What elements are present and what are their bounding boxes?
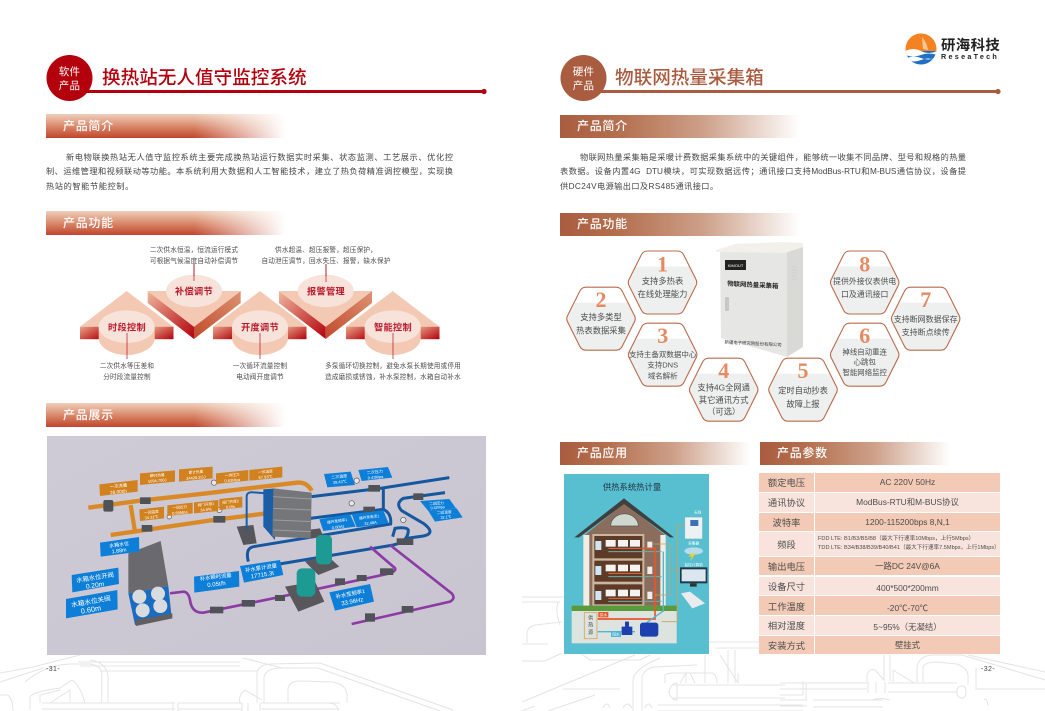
section heading: display xyxy=(46,403,285,427)
section heading: intro: 产品简介 xyxy=(577,119,628,133)
image: heat exchange station 3D scene: 17715.3t xyxy=(251,571,275,580)
heading rule xyxy=(560,55,1001,101)
hexagon text: 支持断点续传 xyxy=(902,327,950,337)
down arrow: alarm xyxy=(279,275,372,339)
section heading: display: 产品展示 xyxy=(63,408,114,422)
section heading: application: 产品应用 xyxy=(577,446,628,460)
image: heat exchange station 3D scene: 补水瞬时流量 xyxy=(199,571,233,583)
row: baud xyxy=(759,513,1000,531)
hexagon text xyxy=(576,276,958,416)
row: working temp: 工作温度 xyxy=(768,602,805,612)
row: protocol xyxy=(759,493,1000,512)
valves xyxy=(103,485,423,622)
row: output voltage xyxy=(759,557,1000,575)
caption: compensation: 二次供水恒温，恒流运行模式 xyxy=(150,247,238,254)
ellipse labels: 报警管理 xyxy=(307,286,345,296)
row: baud: 1200-115200bps 8,N,1 xyxy=(865,517,950,527)
image: heating system house diagram xyxy=(564,474,709,654)
hexagon text: 提供外接仪表供电 xyxy=(833,276,896,286)
text block: intro xyxy=(46,153,453,191)
water tank xyxy=(128,541,172,626)
caption: compensation: 可根据气候温度自动补偿调节 xyxy=(150,258,238,265)
image: collector cabinet: KIMOUT xyxy=(728,263,744,268)
row: humidity: 5~95%（无凝结） xyxy=(873,622,942,632)
chart: function triangles xyxy=(80,275,440,359)
hexagon text: 故障上报 xyxy=(786,399,820,409)
row: bands: FDD LTE: B1/B3/B5/B8（最大下行速率10Mbps，上行5Mbps） xyxy=(818,536,974,542)
row: mounting: 壁挂式 xyxy=(895,640,920,650)
row: size: 400*500*200mm xyxy=(876,583,939,593)
section heading: intro xyxy=(560,115,800,138)
hexagon numbers: 2 xyxy=(596,287,606,312)
feature hexagons xyxy=(566,250,960,422)
image: heat exchange station 3D scene: 补水泵频率1 xyxy=(335,587,366,600)
row: working temp: -20℃-70℃ xyxy=(887,603,928,613)
image: heat exchange station 3D scene xyxy=(47,436,486,655)
row: mounting: 安装方式 xyxy=(768,641,805,651)
image: heat exchange station 3D scene: 阀门开度2 xyxy=(222,498,239,505)
image: heating system house diagram: 供 xyxy=(588,614,593,621)
image: heat exchange station 3D scene: 34.8% xyxy=(200,506,212,513)
caption: alarm: 供水超温、超压报警，超压保护， xyxy=(275,247,377,254)
image: heat exchange station 3D scene: 0.60m xyxy=(80,603,102,616)
heading rule xyxy=(46,55,487,101)
row: rated voltage: AC 220V 50Hz xyxy=(880,477,935,487)
down arrow: compensation xyxy=(148,275,241,339)
hexagon text: 支持多类型 xyxy=(580,312,622,322)
hexagon text: 在线处理能力 xyxy=(638,289,687,299)
image: heat exchange station 3D scene: 阀门开度1 xyxy=(197,501,214,508)
blue data labels xyxy=(66,467,463,618)
badge: hardware product xyxy=(573,66,594,92)
hexagon numbers: 8 xyxy=(859,252,870,277)
row: bands: 频段 xyxy=(777,540,796,550)
gauges xyxy=(167,478,406,523)
image: heat exchange station 3D scene: 32.1℃ xyxy=(440,515,452,520)
row: output voltage: 输出电压 xyxy=(768,562,805,572)
hexagon text: 支持主备双数据中心 xyxy=(629,349,697,359)
hexagon text: （可选） xyxy=(707,406,740,416)
image: heating system house diagram: 天线 xyxy=(694,509,702,514)
hexagon numbers: 4 xyxy=(718,358,729,383)
section heading: functions: 产品功能 xyxy=(63,216,114,230)
caption: time control: 二次供水等压差和 xyxy=(100,363,154,370)
image: heat exchange station 3D scene: 0.32Mpa xyxy=(430,505,446,510)
section heading: functions: 产品功能 xyxy=(577,217,628,231)
image: heat exchange station 3D scene: 二回压力 xyxy=(429,500,444,506)
row: mounting xyxy=(759,636,1000,654)
hexagon text: 域名解析 xyxy=(648,370,678,380)
purple pipes xyxy=(170,545,453,624)
ellipse labels: 智能控制 xyxy=(374,322,412,332)
logo: ReseaTech xyxy=(906,34,1000,64)
image: heat exchange station 3D scene: 一次流量 xyxy=(110,481,128,490)
image: heat exchange station 3D scene: 0.69Mpa xyxy=(172,509,189,516)
logo Chinese name: 研海科技 xyxy=(941,38,1000,54)
hexagon text: 心跳包 xyxy=(854,358,876,366)
section heading: functions xyxy=(560,213,800,236)
image: heat exchange station 3D scene: 0.63Mpa xyxy=(224,477,241,483)
hexagon text: 口及通讯接口 xyxy=(841,289,888,299)
image: heat exchange station 3D scene: 33.96Hz xyxy=(341,597,364,607)
image: heat exchange station 3D scene: 二次温度 xyxy=(331,472,347,480)
hexagon text: 支持断网数据保存 xyxy=(894,314,958,324)
image: heat exchange station 3D scene: 0.00Hz xyxy=(331,523,345,530)
ellipse labels: 补偿调节 xyxy=(175,286,213,296)
image: heat exchange station 3D scene: 循环泵频率1 xyxy=(327,517,348,525)
caption: smart control xyxy=(325,362,461,381)
hexagon text: 定时自动抄表 xyxy=(778,386,829,396)
image: heat exchange station 3D scene: 0.0% xyxy=(226,504,236,510)
logo icon xyxy=(906,34,936,64)
heat exchanger xyxy=(237,488,323,545)
section heading: application xyxy=(560,442,750,465)
page number: 31: -31- xyxy=(46,666,60,673)
row: working temp xyxy=(759,596,1000,615)
text block: intro: 供DC24V电源输出口及RS485通讯接口。 xyxy=(560,182,718,191)
caption: valve control xyxy=(233,362,287,381)
image: collector cabinet xyxy=(716,242,803,357)
image: heat exchange station 3D scene: 0.43Mpa xyxy=(368,474,384,480)
ellipse labels: 开度调节 xyxy=(241,322,279,332)
image: heat exchange station 3D scene: 0.20m xyxy=(85,581,105,591)
pumps xyxy=(285,535,339,612)
badge: hardware product: 产品 xyxy=(573,80,594,92)
section heading: intro: 产品简介 xyxy=(63,119,114,133)
badge: software product: 软件 xyxy=(59,66,80,78)
row: protocol: 通讯协议 xyxy=(768,498,805,508)
up arrow: smart control xyxy=(346,291,440,355)
row: rated voltage: 额定电压 xyxy=(768,478,805,488)
hexagon numbers: 3 xyxy=(657,323,668,348)
hexagon text: 掉线自动重连 xyxy=(843,348,887,356)
image: heat exchange station 3D scene: 瞬时热量 xyxy=(150,472,165,478)
hexagon numbers: 7 xyxy=(920,287,931,312)
hexagon text: 支持多热表 xyxy=(642,276,684,286)
hexagon text: 智能网络监控 xyxy=(843,368,887,377)
image: heating system house diagram: 供水 xyxy=(600,612,607,617)
badge: software product: 产品 xyxy=(59,80,80,92)
image: heat exchange station 3D scene: 水箱水位开阀 xyxy=(75,570,114,585)
image: heat exchange station 3D scene: 24428.2GJ xyxy=(186,474,206,481)
text block: intro: 制、运维管理和视频联动等功能。本系统利用大数据和人工智能技术，建立了热负荷精准调控模型，实现换 xyxy=(46,167,453,176)
image: heat exchange station 3D scene: 一供温度 xyxy=(258,468,273,475)
hexagon numbers: 6 xyxy=(859,323,870,348)
title: 换热站无人值守监控系统 xyxy=(102,67,307,88)
image: heat exchange station 3D scene: 水箱水位关阀 xyxy=(70,593,112,609)
section heading: parameters: 产品参数 xyxy=(777,446,828,460)
image: heat exchange station 3D scene: 28.00t/h xyxy=(110,488,128,495)
image: heat exchange station 3D scene: 1094.700J xyxy=(148,477,167,484)
row: baud: 波特率 xyxy=(773,518,800,528)
hexagon text: 支持DNS xyxy=(647,360,678,370)
caption: smart control: 造成磨损或锈蚀，补水泵控制，水箱自动补水 xyxy=(325,374,461,381)
panel: right page heading xyxy=(560,55,1001,101)
leader tops xyxy=(194,264,326,276)
caption: time control xyxy=(100,362,154,381)
row: rated voltage xyxy=(759,473,1000,492)
orange pipes xyxy=(88,483,312,535)
hexagon numbers xyxy=(596,252,931,383)
hexagon numbers: 1 xyxy=(657,252,668,277)
logo English name: ReseaTech xyxy=(941,52,999,61)
caption: alarm xyxy=(261,246,391,265)
image: heat exchange station 3D scene: 0.05t/h xyxy=(207,581,226,589)
image: heat exchange station 3D scene: 一回温度 xyxy=(144,509,159,515)
text block: intro: 表数据。设备内置4G DTU模块，可实现数据远传；通讯接口支持ModBus-RTU和M-BUS通信协议，设备提 xyxy=(560,167,966,176)
image: collector cabinet: 新疆电子研究院股份有限公司 xyxy=(724,339,782,348)
caption: smart control: 多泵循环切换控制，避免水泵长期使用或停用 xyxy=(325,363,461,370)
image: heat exchange station 3D scene: 累计热量 xyxy=(188,469,204,475)
row: size: 设备尺寸 xyxy=(768,582,805,592)
image: heat exchange station 3D scene: 一供压力 xyxy=(225,472,240,478)
image: heat exchange station 3D scene: 32.48A xyxy=(364,520,377,526)
hexagon numbers: 5 xyxy=(798,358,808,383)
caption: alarm: 自动泄压调节，回水失压、报警，缺水保护 xyxy=(261,258,391,265)
text block: intro: 热站的智能节能控制。 xyxy=(46,182,134,191)
text block: intro: 新电物联换热站无人值守监控系统主要完成换热站运行数据实时采集、状态监测、工艺展示、优化控 xyxy=(66,153,453,162)
ellipse labels: 时段控制 xyxy=(108,322,146,332)
leader lines xyxy=(127,265,393,359)
up arrow: valve control xyxy=(213,291,307,355)
ellipse labels xyxy=(108,286,412,332)
row: bands xyxy=(759,532,1000,556)
image: heat exchange station 3D scene: 水箱水位 xyxy=(109,540,130,550)
up arrow: time control xyxy=(80,291,174,355)
image: heat exchange station 3D scene: 1.88m xyxy=(111,547,127,555)
image: heat exchange station 3D scene: 一回压力 xyxy=(172,504,188,510)
caption: compensation xyxy=(150,246,238,265)
row: output voltage: 一路DC 24V@6A xyxy=(875,561,940,571)
image: heat exchange station 3D scene: 二回温度 xyxy=(437,509,452,515)
image: heat exchange station 3D scene: 二次压力 xyxy=(367,468,383,475)
text block: intro xyxy=(560,153,966,191)
section heading: parameters xyxy=(760,442,950,465)
blue pipes xyxy=(247,478,449,565)
caption: time control: 分时段流量控制 xyxy=(103,374,151,381)
image: heat exchange station 3D scene: 67.93℃ xyxy=(258,474,273,480)
section heading: functions xyxy=(46,211,285,235)
section heading: intro xyxy=(46,114,285,138)
image: heating system house diagram: 源 xyxy=(588,629,593,636)
row: bands: TDD LTE: B34/B38/B39/B40/B41（最大下行速率7.5Mbps，上行1Mbps） xyxy=(818,545,1000,551)
image: heating system house diagram: 回水 xyxy=(612,632,620,637)
image: heating system house diagram: 热 xyxy=(588,622,593,629)
page number: 32: -32- xyxy=(981,666,995,673)
orange data labels xyxy=(99,467,282,521)
badge: hardware product: 硬件 xyxy=(573,66,594,78)
caption: valve control: 一次循环流量控制 xyxy=(233,363,287,370)
image: heating system house diagram: 采集器 xyxy=(688,541,699,546)
image: heat exchange station 3D scene: 39.43℃ xyxy=(333,479,347,485)
caption: valve control: 电动阀开度调节 xyxy=(236,374,284,381)
hexagon text: 热表数据采集 xyxy=(576,326,627,336)
row: protocol: ModBus-RTU和M-BUS协议 xyxy=(856,497,959,507)
image: heat exchange station 3D scene: 补水累计流量 xyxy=(245,561,278,574)
image: heating system house diagram: 供热系统热计量 xyxy=(603,482,661,492)
row: size xyxy=(759,577,1000,595)
hexagon text: 支持4G全网通 xyxy=(697,382,751,392)
panel: left page heading xyxy=(46,55,487,101)
badge: software product xyxy=(59,66,80,92)
row: humidity: 相对湿度 xyxy=(768,621,805,631)
image: heat exchange station 3D scene: 循环泵电流1 xyxy=(359,513,380,521)
row: humidity xyxy=(759,616,1000,635)
image: collector cabinet: 物联网热量采集箱 xyxy=(727,279,779,290)
text block: intro: 物联网热量采集箱是采暖计费数据采集系统中的关键组件，能够统一收集不同品牌、型号和规格的热量 xyxy=(580,153,966,162)
image: heat exchange station 3D scene: 34.31℃ xyxy=(144,514,159,520)
title: 物联网热量采集箱 xyxy=(615,67,764,88)
image: heating system house diagram: 监控计算机 xyxy=(685,562,703,567)
hexagon text: 其它通讯方式 xyxy=(699,395,749,405)
